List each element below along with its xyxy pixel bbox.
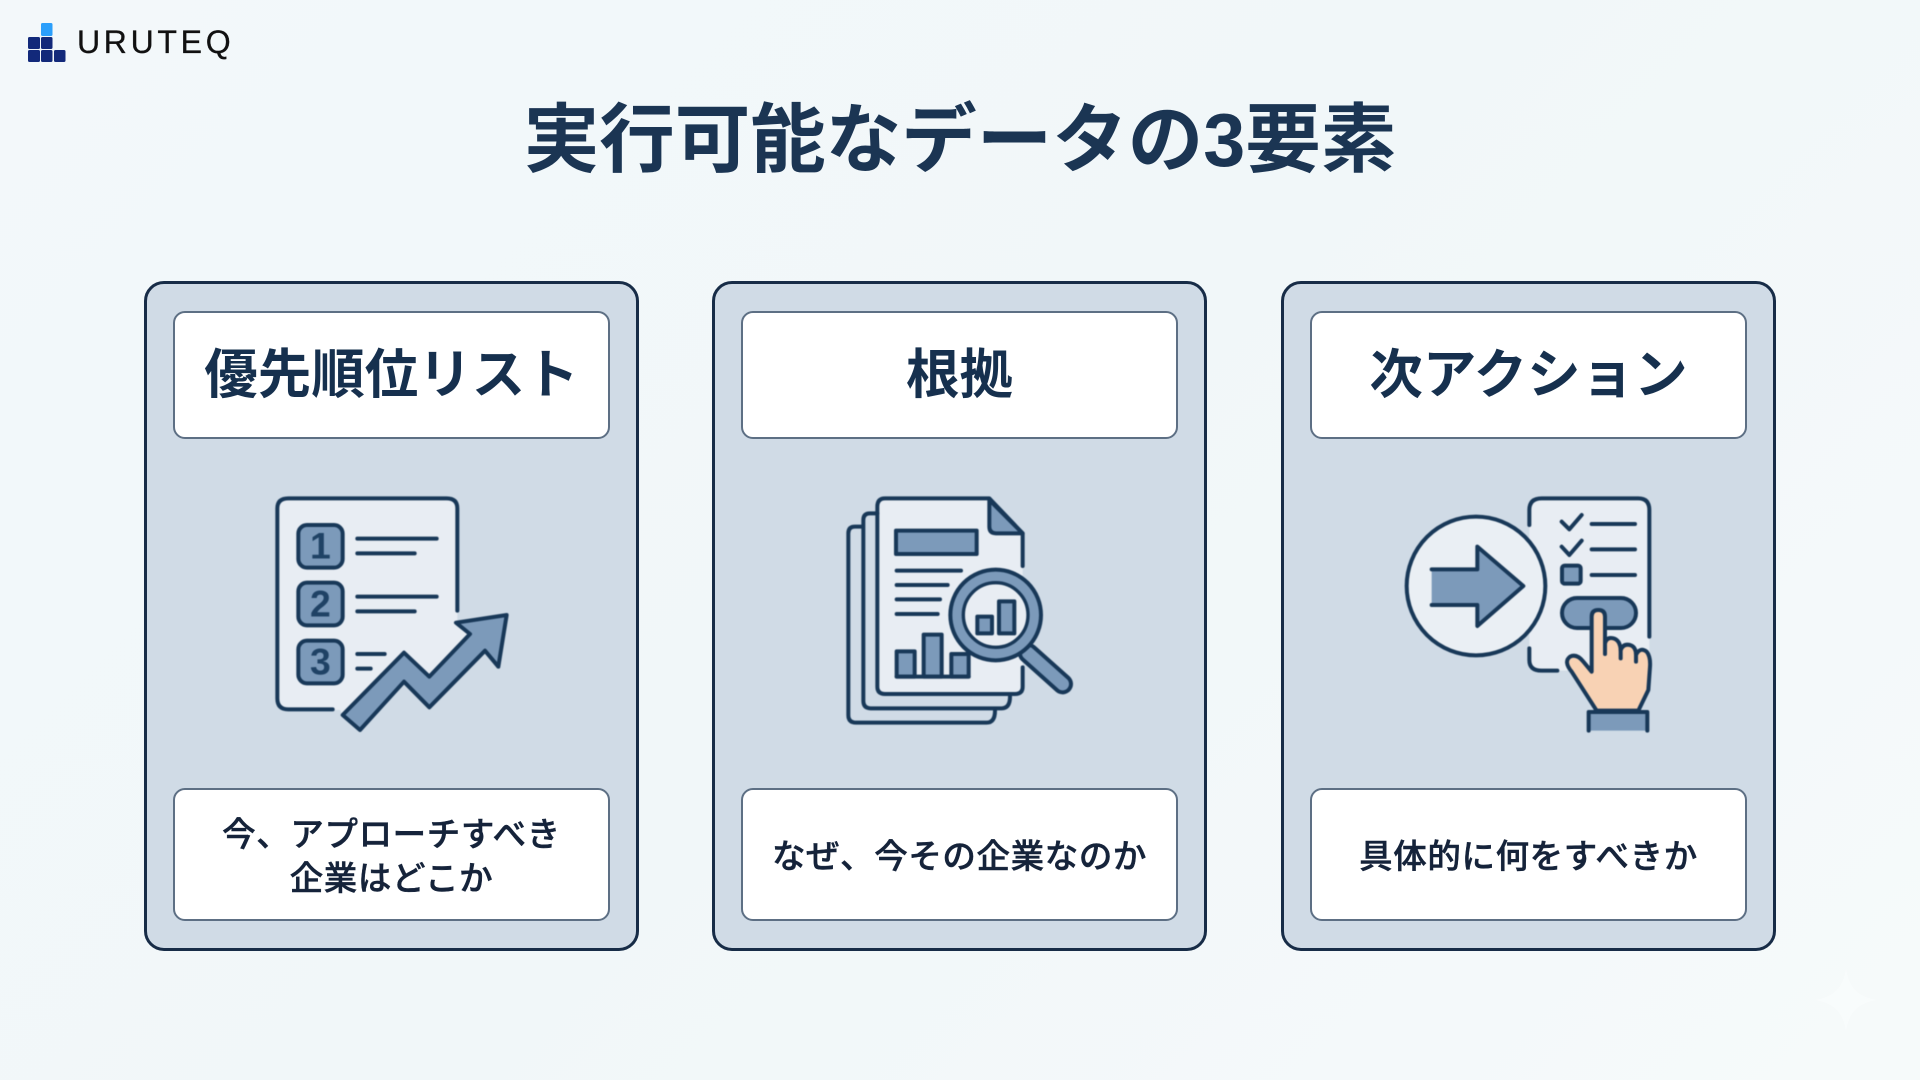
heading: priority list: 優先順位リスト [204, 346, 579, 405]
panel: priority list [144, 281, 639, 951]
icon: documents with magnifying glass [846, 496, 1074, 726]
logo wordmark: URUTEQ [77, 24, 234, 60]
panel: rationale [712, 281, 1207, 951]
icon: ranked list with rising arrow: 2 [310, 582, 331, 624]
heading: rationale [741, 311, 1178, 439]
description: rationale: なぜ、今その企業なのか [772, 838, 1147, 876]
description: next action [1310, 788, 1747, 921]
description: priority list: 企業はどこか [290, 860, 493, 898]
heading: next action [1310, 311, 1747, 439]
watermark sparkle [1812, 966, 1880, 1034]
icon: ranked list with rising arrow: 1 [310, 525, 331, 567]
description: rationale [741, 788, 1178, 921]
description: priority list [173, 788, 610, 921]
icon: ranked list with rising arrow [274, 496, 510, 733]
title: 実行可能なデータの3要素 [524, 98, 1396, 182]
logo [28, 23, 234, 62]
heading: priority list [173, 311, 610, 439]
logo mark [28, 23, 66, 62]
heading: next action: 次アクション [1369, 346, 1688, 405]
description: next action: 具体的に何をすべきか [1359, 838, 1698, 876]
heading: rationale: 根拠 [906, 346, 1013, 405]
description: priority list: 今、アプローチすべき [222, 816, 561, 854]
panel: next action [1281, 281, 1776, 951]
icon: ranked list with rising arrow: 3 [310, 640, 331, 682]
icon: arrow, checklist and pointing hand [1404, 496, 1653, 734]
